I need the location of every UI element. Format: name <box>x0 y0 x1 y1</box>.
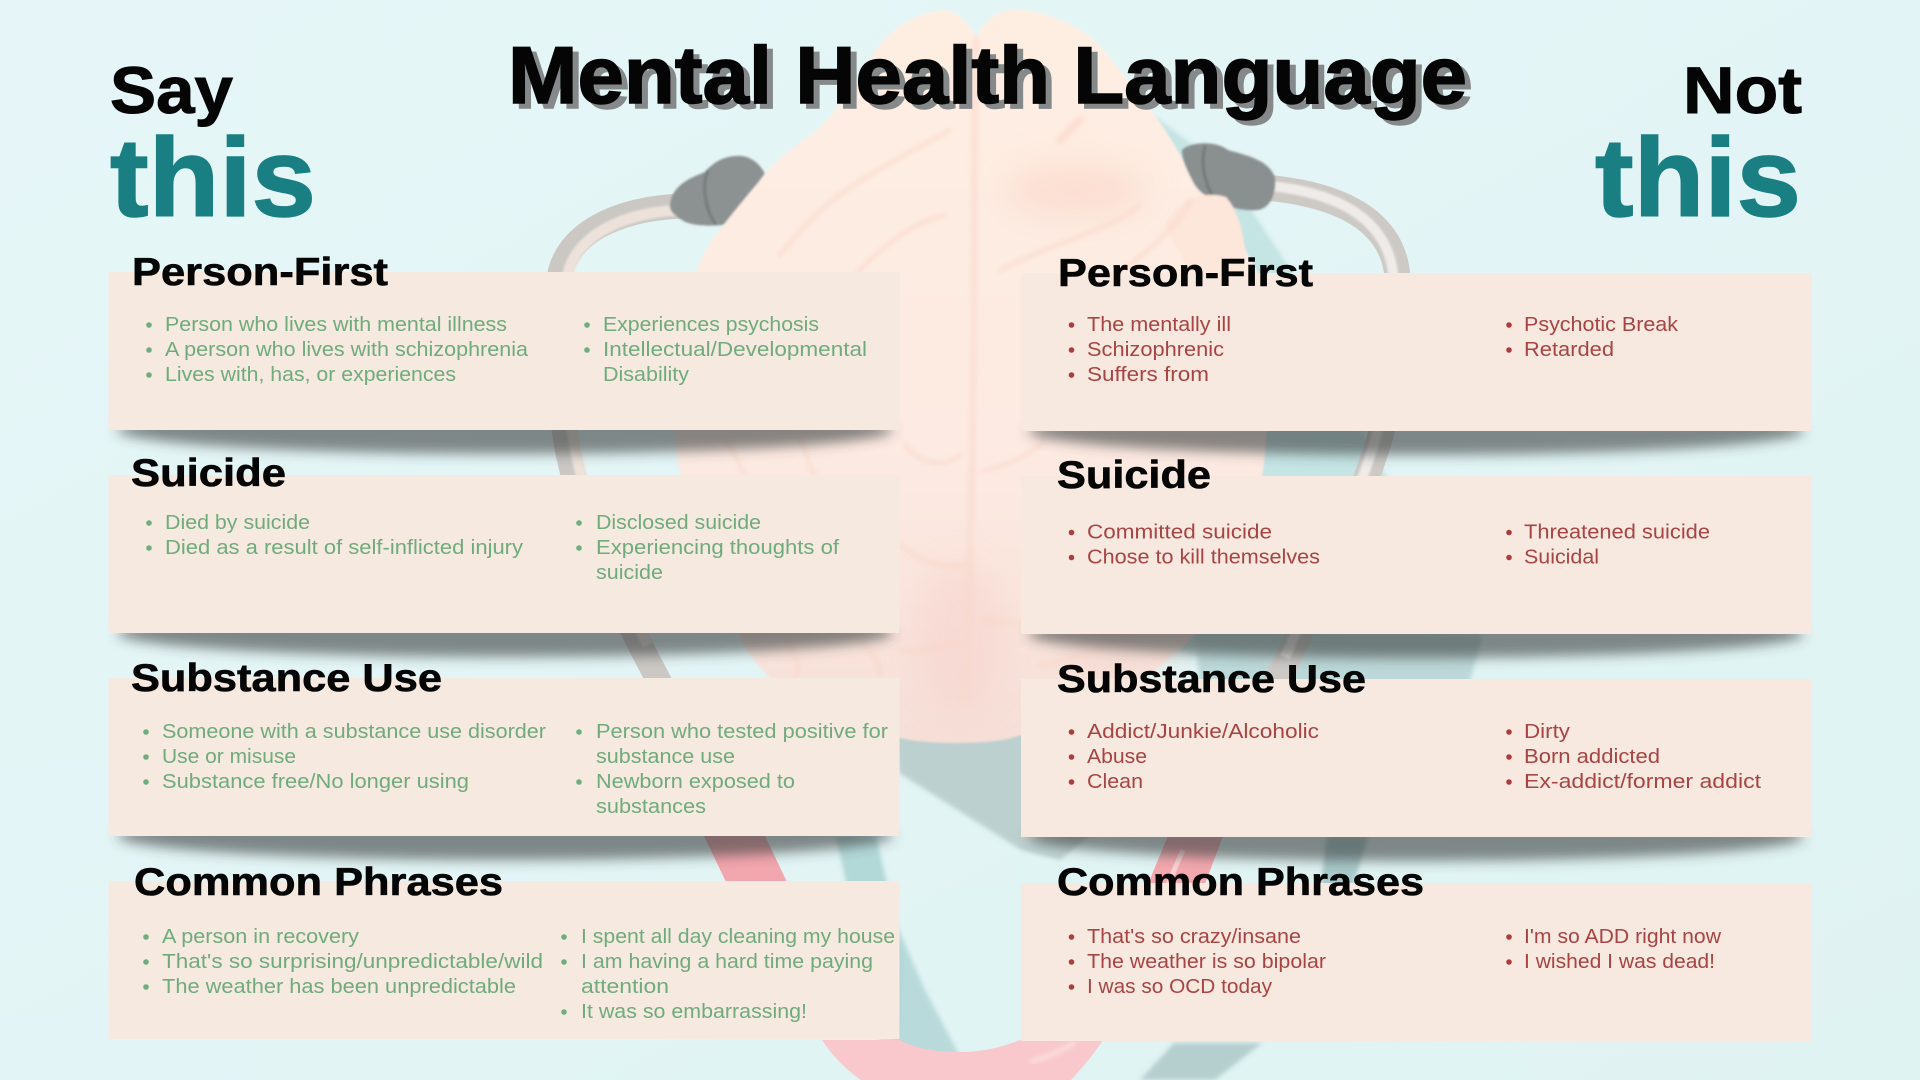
panel: say Common Phrases: I am having a hard time paying <box>581 951 873 973</box>
panel: say Common Phrases <box>108 861 900 1039</box>
panel: not Suicide <box>1021 454 1812 634</box>
panel: say Substance Use: Use or misuse <box>162 746 296 768</box>
panel: not Common Phrases: That's so crazy/insane <box>1087 926 1301 948</box>
panel: not Substance Use <box>1021 658 1812 837</box>
panel: not Person-First: Schizophrenic <box>1087 339 1224 361</box>
panel: not Suicide: Committed suicide <box>1087 522 1272 544</box>
panel: not Suicide: Suicide <box>1057 454 1211 497</box>
panel: say Substance Use: substance use <box>596 746 735 768</box>
panel: say Suicide <box>108 452 900 633</box>
panel: not Substance Use: Abuse <box>1087 746 1147 768</box>
title: Mental Health Language <box>514 36 1473 126</box>
panel: say Person-First: A person who lives with schizophrenia <box>165 339 529 361</box>
panel: say Suicide: Suicide <box>131 452 286 495</box>
panel: say Person-First: Intellectual/Developmental <box>603 339 867 361</box>
panel: say Person-First: Person-First <box>132 251 388 294</box>
panel: say Suicide: Disclosed suicide <box>596 512 761 534</box>
heading: Say this <box>110 53 316 240</box>
heading: Say this: this <box>110 116 316 240</box>
panel: not Common Phrases <box>1021 861 1812 1041</box>
panel: not Common Phrases: I'm so ADD right now <box>1524 926 1722 948</box>
panel: say Substance Use: Person who tested positive for <box>596 721 888 743</box>
brain cast shadow <box>836 117 1482 1080</box>
panel: say Suicide: Died as a result of self-inflicted injury <box>165 537 523 559</box>
panel: not Substance Use: Clean <box>1087 771 1143 793</box>
panel: say Substance Use: Someone with a substance use disorder <box>162 721 546 743</box>
panel: not Common Phrases: I wished I was dead! <box>1524 951 1715 973</box>
panel: not Suicide: Suicidal <box>1524 546 1599 568</box>
heading: Not this: this <box>1595 116 1801 240</box>
panel: say Suicide: Died by suicide <box>165 512 310 534</box>
panel: not Substance Use: Dirty <box>1524 721 1570 743</box>
panel: not Suicide: Chose to kill themselves <box>1087 546 1320 568</box>
panel: say Substance Use: substances <box>596 796 706 818</box>
panel: say Substance Use: Substance free/No longer using <box>162 771 469 793</box>
panel: say Common Phrases: Common Phrases <box>134 861 503 904</box>
panel: say Substance Use: Substance Use <box>131 657 442 700</box>
panel: say Person-First: Experiences psychosis <box>603 314 819 336</box>
panel: not Person-First: Retarded <box>1524 339 1614 361</box>
panel: not Substance Use: Substance Use <box>1057 658 1366 701</box>
panel: say Person-First: Person who lives with mental illness <box>165 314 507 336</box>
panel: say Suicide: Experiencing thoughts of <box>596 537 839 559</box>
panel: say Person-First <box>108 251 900 430</box>
panel: not Common Phrases: Common Phrases <box>1057 861 1424 904</box>
panel: not Person-First: The mentally ill <box>1087 314 1231 336</box>
panel: say Substance Use: Newborn exposed to <box>596 771 795 793</box>
panel: not Substance Use: Born addicted <box>1524 746 1660 768</box>
panel: say Common Phrases: It was so embarrassing! <box>581 1001 807 1023</box>
left earpiece <box>670 156 768 226</box>
panel: say Common Phrases: A person in recovery <box>162 926 359 948</box>
panel: not Common Phrases: I was so OCD today <box>1087 976 1272 998</box>
panel: not Suicide: Threatened suicide <box>1524 522 1710 544</box>
right earpiece <box>1165 143 1275 272</box>
panel: say Suicide: suicide <box>596 562 663 584</box>
panel: not Common Phrases: The weather is so bipolar <box>1087 951 1326 973</box>
heading: Not this: Not <box>1683 53 1802 127</box>
panel: say Common Phrases: I spent all day cleaning my house <box>581 926 895 948</box>
heading: Say this: Say <box>110 53 233 127</box>
panel: not Person-First: Person-First <box>1058 252 1313 295</box>
panel: say Common Phrases: That's so surprising/unpredictable/wild <box>162 951 543 973</box>
brain <box>674 10 1269 743</box>
panel: not Person-First: Suffers from <box>1087 364 1209 386</box>
panel: not Person-First: Psychotic Break <box>1524 314 1679 336</box>
panel: not Substance Use: Ex-addict/former addict <box>1524 771 1762 793</box>
title: Mental Health Language <box>508 31 1467 121</box>
heading: Not this <box>1595 53 1802 240</box>
panel: say Person-First: Lives with, has, or experiences <box>165 364 456 386</box>
panel: say Substance Use <box>108 657 900 836</box>
brain folds <box>915 164 1180 715</box>
panel lift shadows <box>117 406 1804 861</box>
stethoscope tubes <box>557 186 1398 1080</box>
panel: say Common Phrases: The weather has been unpredictable <box>162 976 516 998</box>
panel: say Person-First: Disability <box>603 364 689 386</box>
panel: not Substance Use: Addict/Junkie/Alcoholic <box>1087 721 1319 743</box>
panel: not Person-First <box>1021 252 1812 431</box>
panel: say Common Phrases: attention <box>581 976 669 998</box>
